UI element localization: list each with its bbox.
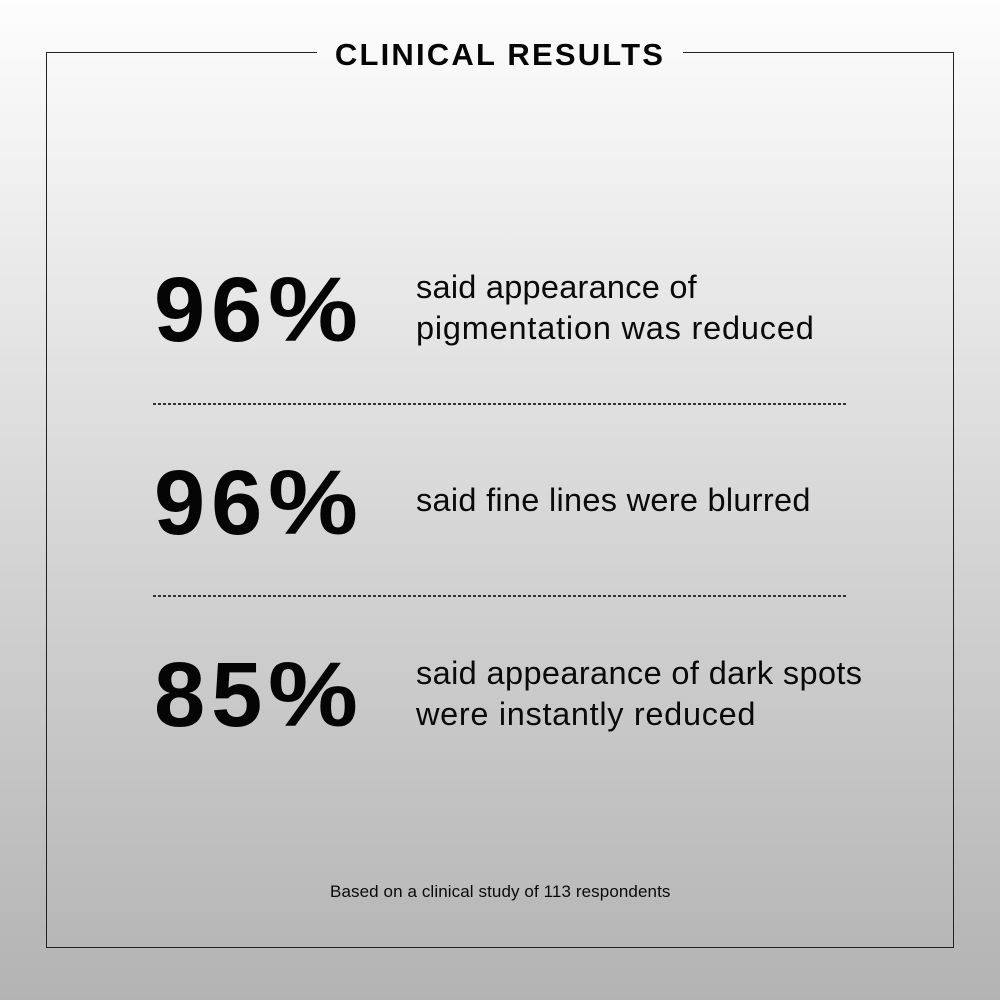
stat: 96% pigmentation: %	[268, 259, 358, 361]
stat: 96% fine lines: %	[268, 452, 358, 554]
stat: 85% dark spots	[154, 644, 358, 746]
text: pigmentation: pigmentation was reduced	[416, 310, 815, 346]
text: pigmentation	[416, 269, 815, 346]
text: dark spots: were instantly reduced	[416, 696, 756, 732]
stat: 96% fine lines	[154, 452, 358, 554]
stat: 85% dark spots: 85	[154, 644, 268, 746]
stat: 85% dark spots: %	[268, 644, 358, 746]
footnote: Based on a clinical study of 113 respondents	[330, 882, 671, 901]
text: dark spots	[416, 655, 862, 732]
text: pigmentation: said appearance of	[416, 269, 697, 305]
text: fine lines: said fine lines were blurred	[416, 482, 811, 518]
stat: 96% pigmentation	[154, 259, 358, 361]
title: CLINICAL RESULTS	[335, 37, 665, 72]
text: dark spots: said appearance of dark spots	[416, 655, 862, 691]
stat: 96% fine lines: 96	[154, 452, 268, 554]
stat: 96% pigmentation: 96	[154, 259, 268, 361]
